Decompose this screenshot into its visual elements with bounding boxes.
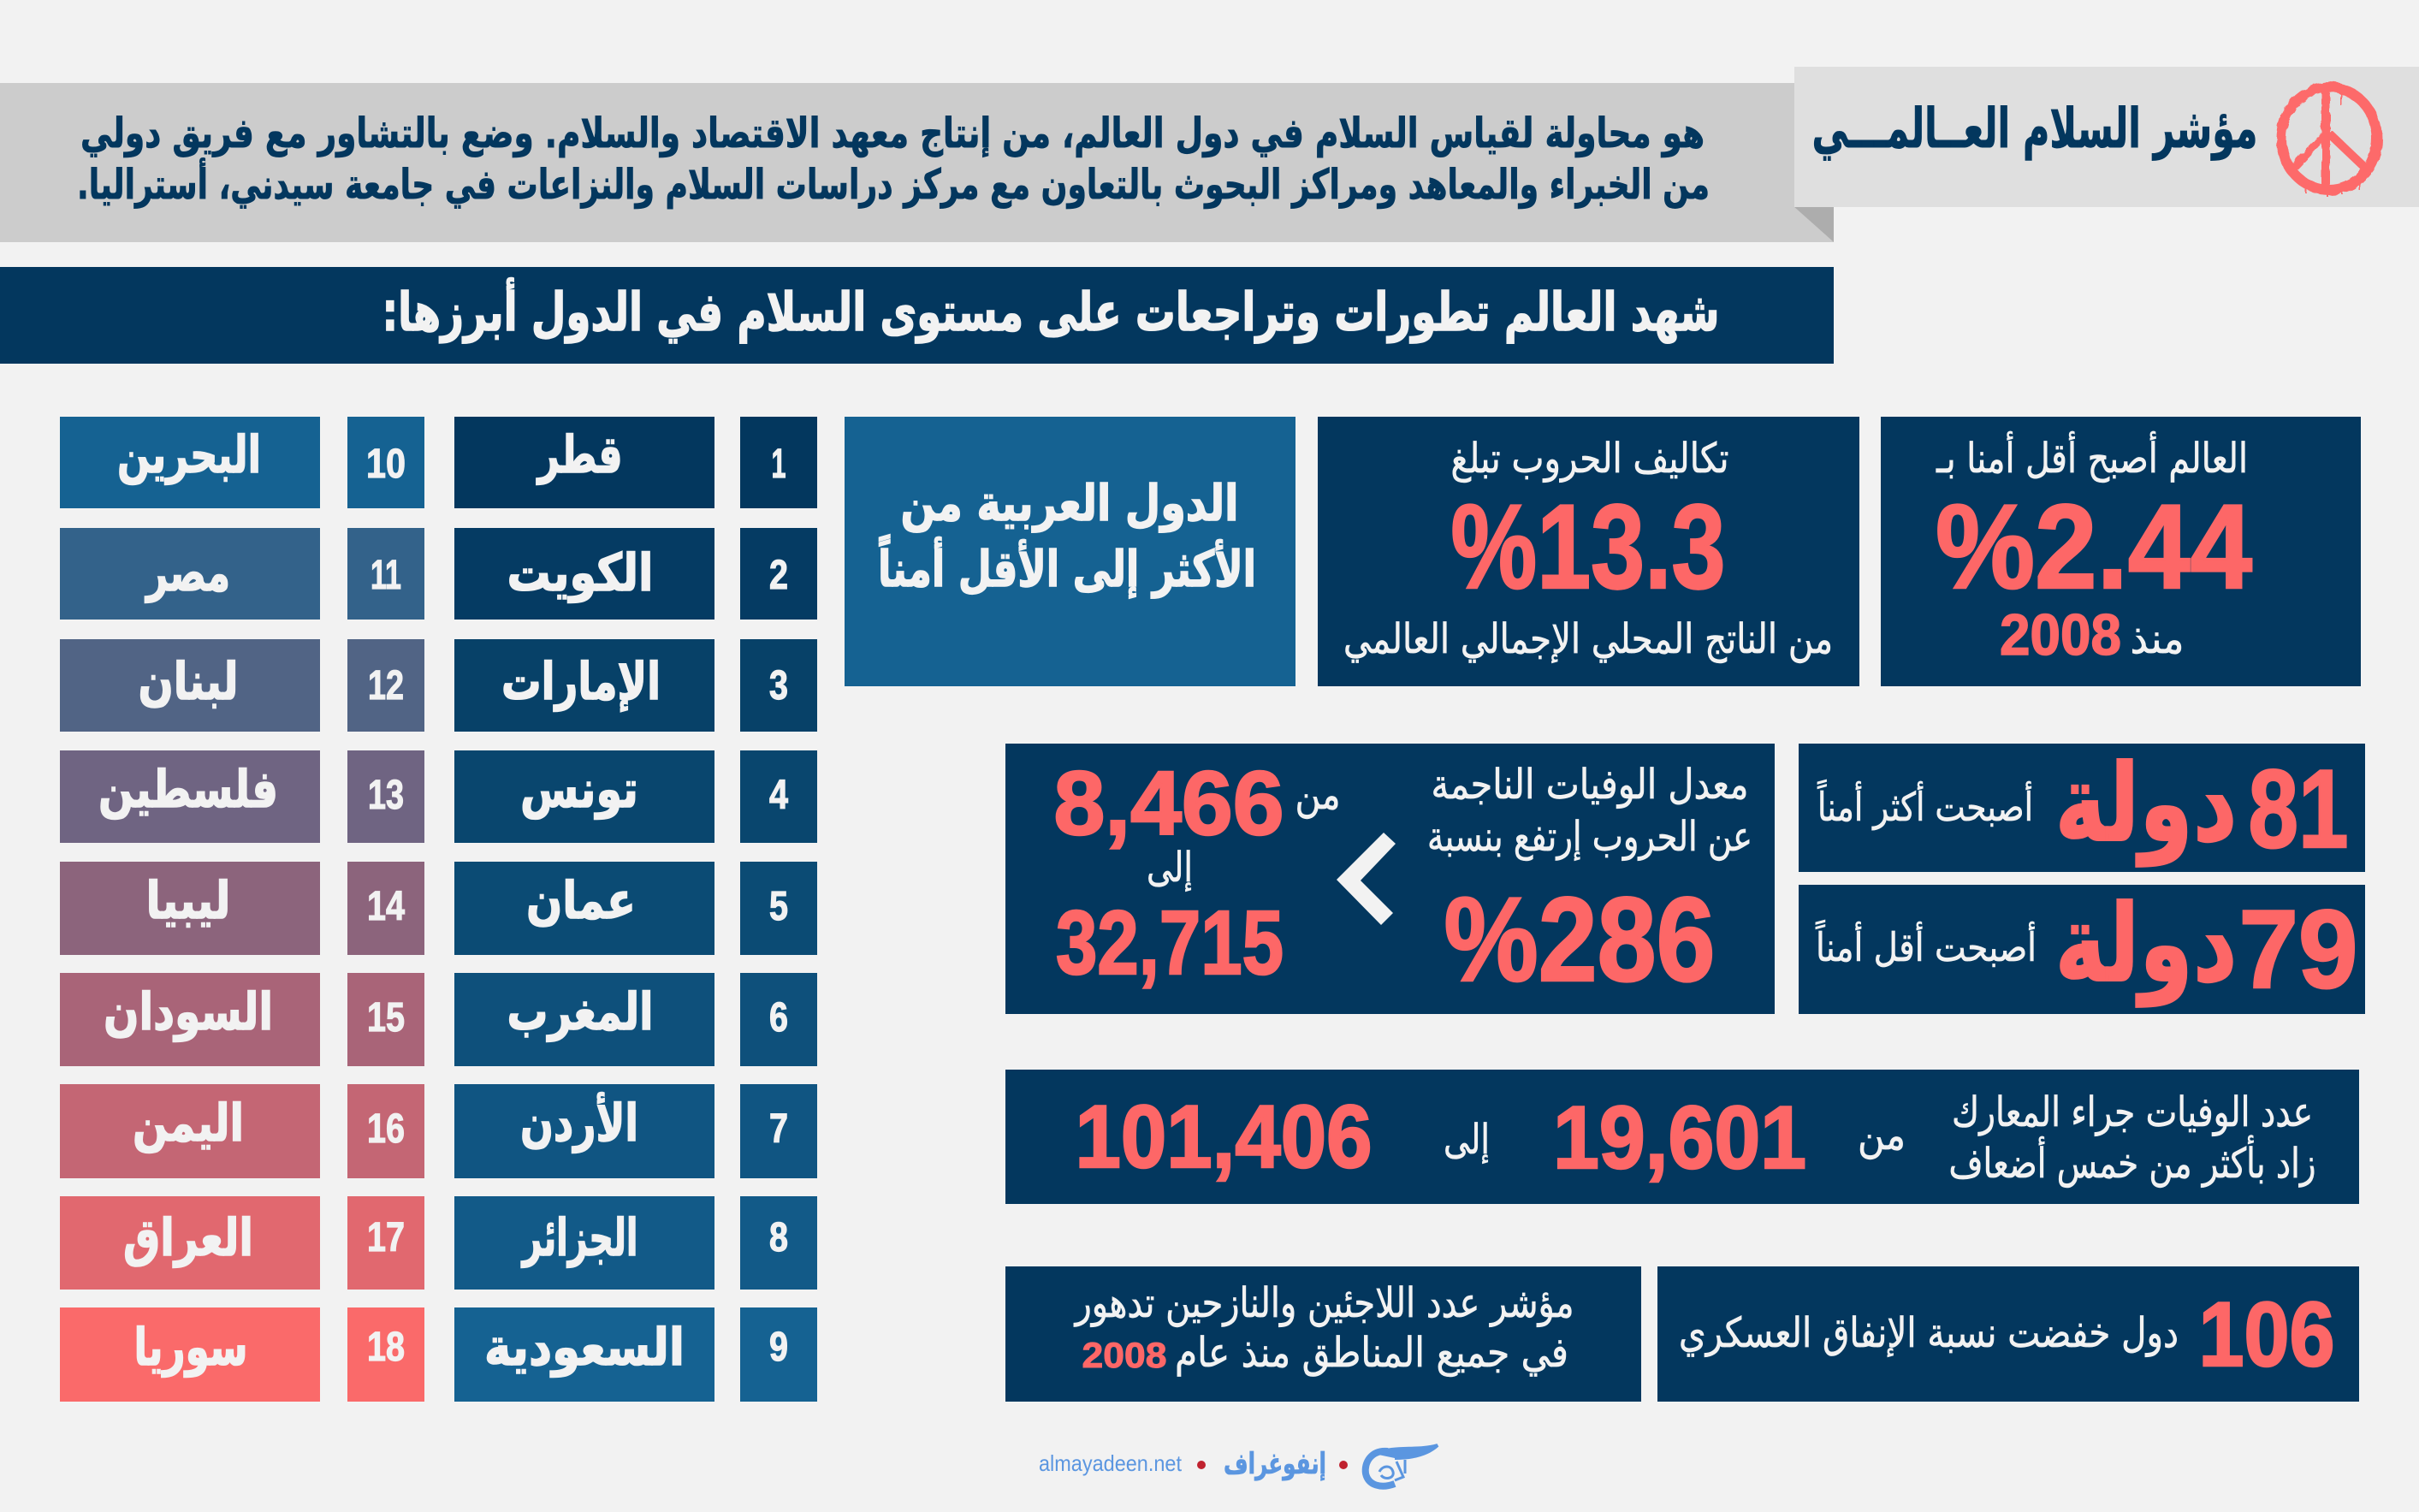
row 3: 3: [769, 663, 788, 709]
row 6: 15: [367, 995, 405, 1041]
row 5: 14: [367, 884, 405, 929]
heading bar: شهد العالم تطورات وتراجعات على مستوى السلام في الدول أبرزها:: [382, 277, 1720, 344]
row 8: 17: [367, 1215, 405, 1260]
row 7: 16: [367, 1106, 405, 1152]
intro ribbon: من الخبراء والمعاهد ومراكز البحوث بالتعاون مع مركز دراسات السلام والنزاعات في جامعة سيدني، أستراليا.: [77, 157, 1710, 209]
panel: world less peaceful: العالم أصبح أقل أمنا بـ: [1936, 431, 2248, 483]
panel: battle-related war deaths rate: معدل الوفيات الناجمة: [1431, 761, 1749, 809]
panel: 81 countries more peaceful: دولة: [2055, 742, 2237, 867]
row 9: السعودية: [484, 1318, 685, 1378]
panel: refugees index: [1005, 1266, 1641, 1402]
row 5: 5: [769, 884, 788, 929]
panel: battle-related war deaths rate: 32,715: [1056, 892, 1284, 993]
panel: battle deaths multiplied: عدد الوفيات جراء المعارك: [1952, 1088, 2313, 1136]
row 2: مصر: [145, 543, 230, 603]
panel: world less peaceful: 2008: [2000, 602, 2121, 667]
row 9: سوريا: [133, 1318, 248, 1378]
intro ribbon: هو محاولة لقياس السلام في دول العالم، من إنتاج معهد الاقتصاد والسلام. وضع بالتشاور مع فريق دولي: [80, 110, 1705, 157]
panel: battle deaths multiplied: إلى: [1444, 1116, 1490, 1164]
row 7: [60, 1084, 817, 1178]
panel: battle-related war deaths rate: %286: [1444, 872, 1715, 1006]
row 8: الجزائر: [521, 1208, 638, 1268]
footer: source and logo: [1039, 1445, 1438, 1486]
row 2: 11: [371, 553, 401, 598]
panel: world less peaceful: [1881, 417, 2361, 686]
footer: source and logo: almayadeen.net: [1039, 1450, 1183, 1476]
heading bar: [0, 267, 1834, 364]
row 4: تونس: [520, 760, 638, 820]
row 4: [60, 750, 817, 843]
row 6: المغرب: [507, 982, 654, 1042]
arrow: chevron: [1337, 833, 1396, 925]
row 8: العراق: [123, 1208, 253, 1268]
row 7: الأردن: [520, 1092, 638, 1153]
panel: world less peaceful: %2.44: [1936, 479, 2252, 614]
row 6: 6: [769, 995, 788, 1041]
panel: battle-related war deaths rate: عن الحروب إرتفع بنسبة: [1427, 813, 1752, 861]
panel: war costs: تكاليف الحروب تبلغ: [1451, 435, 1728, 483]
panel: 79 countries less peaceful: أصبحت أقل أمناً: [1815, 920, 2037, 970]
panel: 81 countries more peaceful: 81: [2249, 746, 2348, 871]
row 2: [60, 528, 817, 620]
row 4: 13: [368, 773, 404, 818]
row 9: [60, 1307, 817, 1402]
row 7: 7: [769, 1106, 788, 1152]
row 5: [60, 862, 817, 955]
panel: 79 countries less peaceful: [1799, 882, 2365, 1014]
panel: battle deaths multiplied: زاد بأكثر من خمس أضعاف: [1949, 1135, 2315, 1188]
panel: war costs: من الناتج المحلي الإجمالي العالمي: [1343, 615, 1833, 663]
row 4: 4: [769, 773, 788, 818]
row 7: اليمن: [133, 1094, 244, 1153]
row 3: [60, 639, 817, 732]
row 5: عمان: [526, 871, 636, 931]
row 6: السودان: [104, 982, 273, 1042]
intro ribbon: [0, 83, 1834, 242]
ranking table: rank 10 to 18 and rank 1 to 9: [60, 417, 817, 1402]
row 9: 18: [367, 1325, 405, 1370]
panel: Arab countries caption: الأكثر إلى الأقل أمناً: [878, 534, 1256, 599]
row 1: 1: [772, 442, 786, 487]
row 2: 2: [769, 553, 788, 598]
panel: war costs: [1318, 417, 1859, 686]
panel: refugees index: في جميع المناطق منذ عام: [1175, 1329, 1568, 1377]
row 8: [60, 1196, 817, 1290]
panel: 79 countries less peaceful: 79: [2238, 886, 2358, 1011]
row 6: [60, 973, 817, 1066]
panel: world less peaceful: منذ: [2131, 615, 2184, 663]
row 1: قطر: [536, 425, 623, 485]
row 3: الإمارات: [501, 652, 661, 712]
panel: military spending: [1657, 1266, 2359, 1402]
row 1: البحرين: [117, 425, 261, 485]
panel: military spending: دول خفضت نسبة الإنفاق العسكري: [1679, 1309, 2179, 1357]
panel: Arab countries caption: الدول العربية من: [900, 474, 1239, 533]
row 3: لبنان: [139, 652, 238, 712]
panel: 81 countries more peaceful: أصبحت أكثر أمناً: [1817, 780, 2033, 831]
icon: peace symbol: [2281, 86, 2377, 197]
panel: 81 countries more peaceful: [1799, 742, 2365, 872]
row 1: [60, 417, 817, 508]
panel: refugees index: مؤشر عدد اللاجئين والنازحين تدهور: [1074, 1279, 1574, 1327]
panel: battle deaths multiplied: [1005, 1070, 2359, 1204]
panel: battle-related war deaths rate: 8,466: [1054, 753, 1284, 854]
row 1: 10: [366, 442, 406, 487]
row 5: ليبيا: [145, 871, 231, 931]
panel: battle-related war deaths rate: إلى: [1147, 844, 1193, 892]
row 2: الكويت: [507, 543, 654, 603]
row 3: 12: [368, 663, 404, 709]
row 9: 9: [769, 1325, 788, 1370]
panel: Arab countries caption: [845, 417, 1295, 686]
row 8: 8: [769, 1215, 788, 1260]
icon: Al Mayadeen logo: [1366, 1445, 1438, 1486]
row 4: فلسطين: [98, 760, 278, 820]
panel: refugees index: 2008: [1082, 1335, 1167, 1375]
panel: military spending: 106: [2199, 1283, 2334, 1385]
panel: war costs: %13.3: [1451, 479, 1725, 614]
panel: battle deaths multiplied: 101,406: [1075, 1088, 1373, 1187]
panel: battle-related war deaths rate: من: [1295, 771, 1340, 819]
header panel: [1794, 67, 2419, 207]
footer: source and logo: إنفوغراف: [1224, 1447, 1326, 1481]
panel: battle deaths multiplied: 19,601: [1553, 1088, 1806, 1188]
panel: 79 countries less peaceful: دولة: [2055, 882, 2237, 1007]
panel: battle-related war deaths rate: [1005, 744, 1775, 1014]
panel: battle deaths multiplied: من: [1858, 1112, 1906, 1159]
